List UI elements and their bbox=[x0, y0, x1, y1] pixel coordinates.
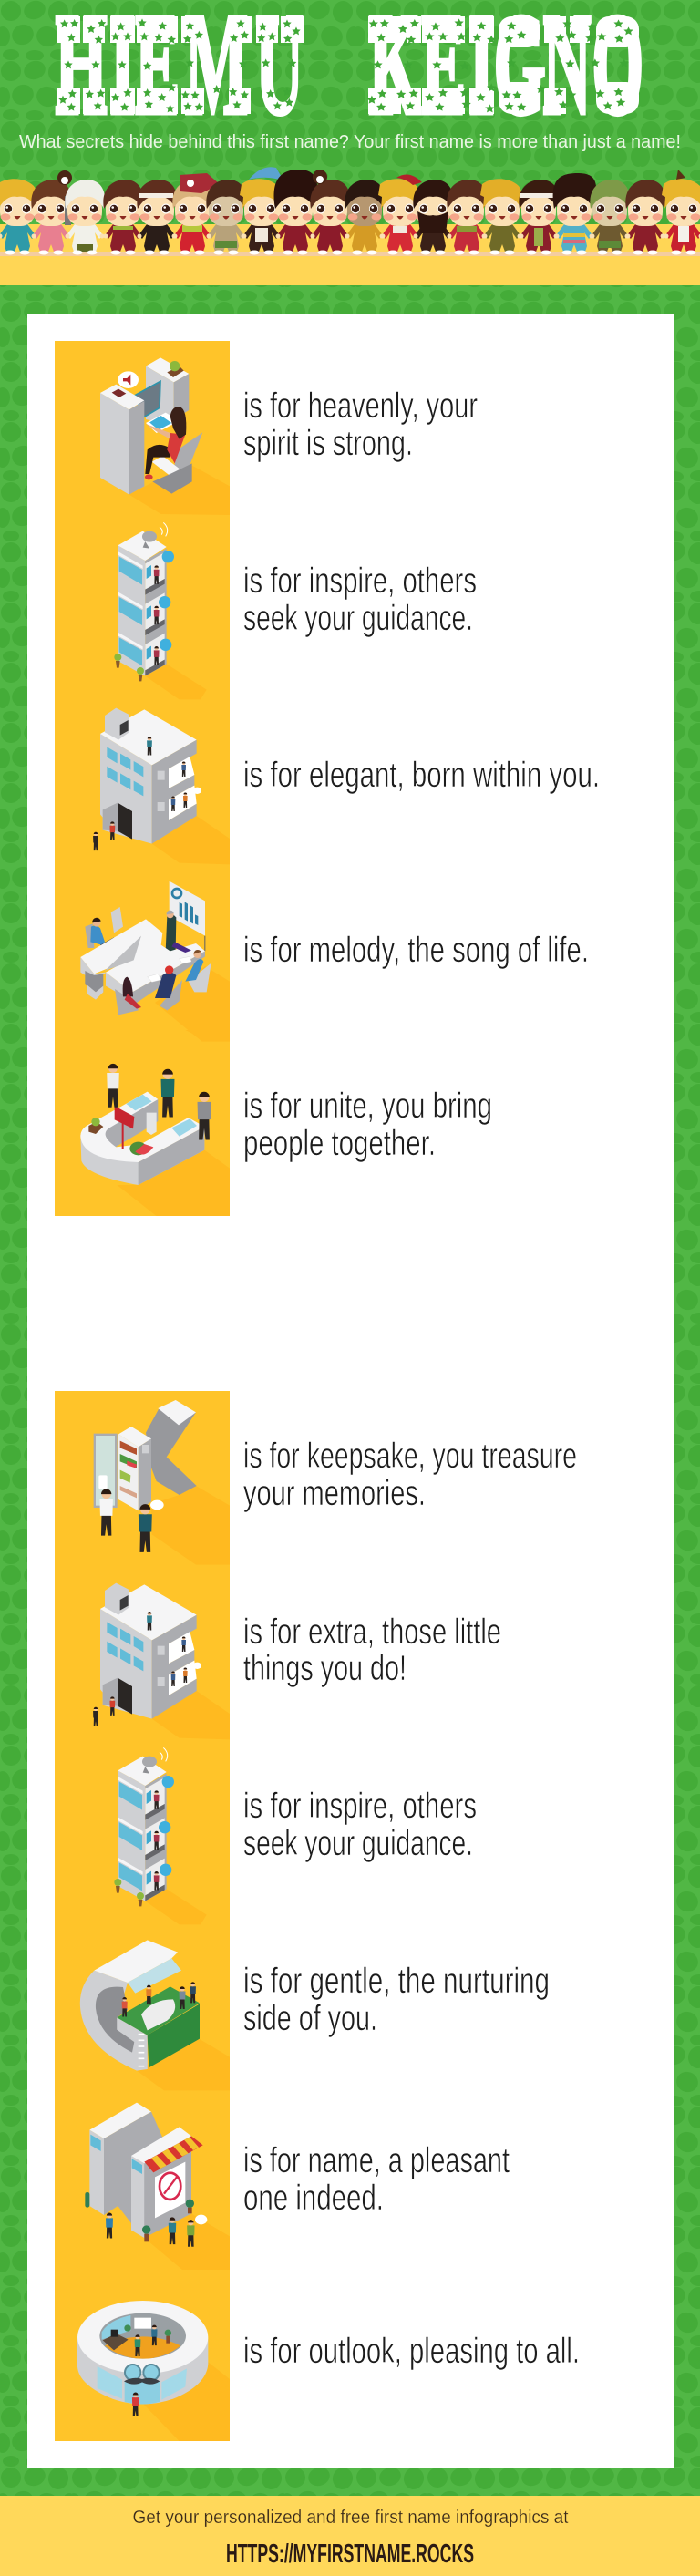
orange strip: last name bbox=[55, 1391, 230, 2441]
subtitle: What secrets hide behind this first name? Your first name is more than just a name! bbox=[19, 132, 681, 152]
text: H: spirit is strong. bbox=[243, 424, 413, 463]
illustration: letter K refrigerator bbox=[94, 1400, 230, 1565]
white content panel bbox=[27, 314, 674, 2468]
text: I bbox=[243, 562, 477, 638]
text: K: is for keepsake, you treasure bbox=[243, 1437, 577, 1476]
footer bbox=[0, 2496, 700, 2576]
text: I second: is for inspire, others bbox=[243, 1787, 477, 1826]
footer url: HTTPS://MYFIRSTNAME.ROCKS bbox=[226, 2540, 474, 2569]
illustration: letter E building (repeat) bbox=[93, 1583, 230, 1739]
illustration: letter U reception desk bbox=[80, 1030, 230, 1216]
text: I second bbox=[243, 1787, 477, 1863]
text: G: side of you. bbox=[243, 1999, 377, 2038]
header bbox=[0, 0, 700, 285]
text: H: is for heavenly, your bbox=[243, 386, 478, 426]
text: E second: is for extra, those little bbox=[243, 1613, 501, 1652]
illustration: letter I tower bbox=[114, 522, 207, 699]
ground strip bbox=[0, 252, 700, 256]
text: E second bbox=[243, 1613, 501, 1688]
text: I second: seek your guidance. bbox=[243, 1824, 473, 1863]
text: I: is for inspire, others bbox=[243, 562, 477, 601]
illustration: letter N storefront bbox=[85, 2103, 230, 2270]
text: U: people together. bbox=[243, 1124, 436, 1163]
text: G bbox=[243, 1962, 550, 2038]
illustration: letter M meeting room bbox=[80, 881, 230, 1042]
orange strip: first name bbox=[55, 341, 230, 1216]
text: U: is for unite, you bring bbox=[243, 1087, 492, 1126]
illustration: letter O optician bbox=[77, 2301, 230, 2441]
text: H bbox=[243, 386, 478, 463]
illustration: letter H office bbox=[100, 357, 230, 515]
title: HIEMU KEIGNO bbox=[55, 0, 643, 145]
text: N: is for name, a pleasant bbox=[243, 2141, 510, 2180]
illustration: letter G shop bbox=[80, 1940, 230, 2090]
row of chibi characters bbox=[0, 167, 700, 255]
text: U bbox=[243, 1087, 492, 1163]
illustration: letter E building bbox=[93, 708, 230, 864]
text: N: one indeed. bbox=[243, 2179, 384, 2218]
text: I: seek your guidance. bbox=[243, 599, 473, 638]
text: M: is for melody, the song of life. bbox=[243, 931, 589, 970]
text: K: your memories. bbox=[243, 1474, 426, 1513]
yellow band bbox=[0, 224, 700, 285]
footer line: Get your personalized and free first name infographics at bbox=[133, 2508, 569, 2528]
text: K bbox=[243, 1437, 577, 1513]
text: N bbox=[243, 2141, 510, 2218]
text: E second: things you do! bbox=[243, 1649, 407, 1688]
text: G: is for gentle, the nurturing bbox=[243, 1962, 550, 2001]
text: O: is for outlook, pleasing to all. bbox=[243, 2332, 580, 2371]
illustration: letter I tower (repeat) bbox=[114, 1747, 207, 1924]
